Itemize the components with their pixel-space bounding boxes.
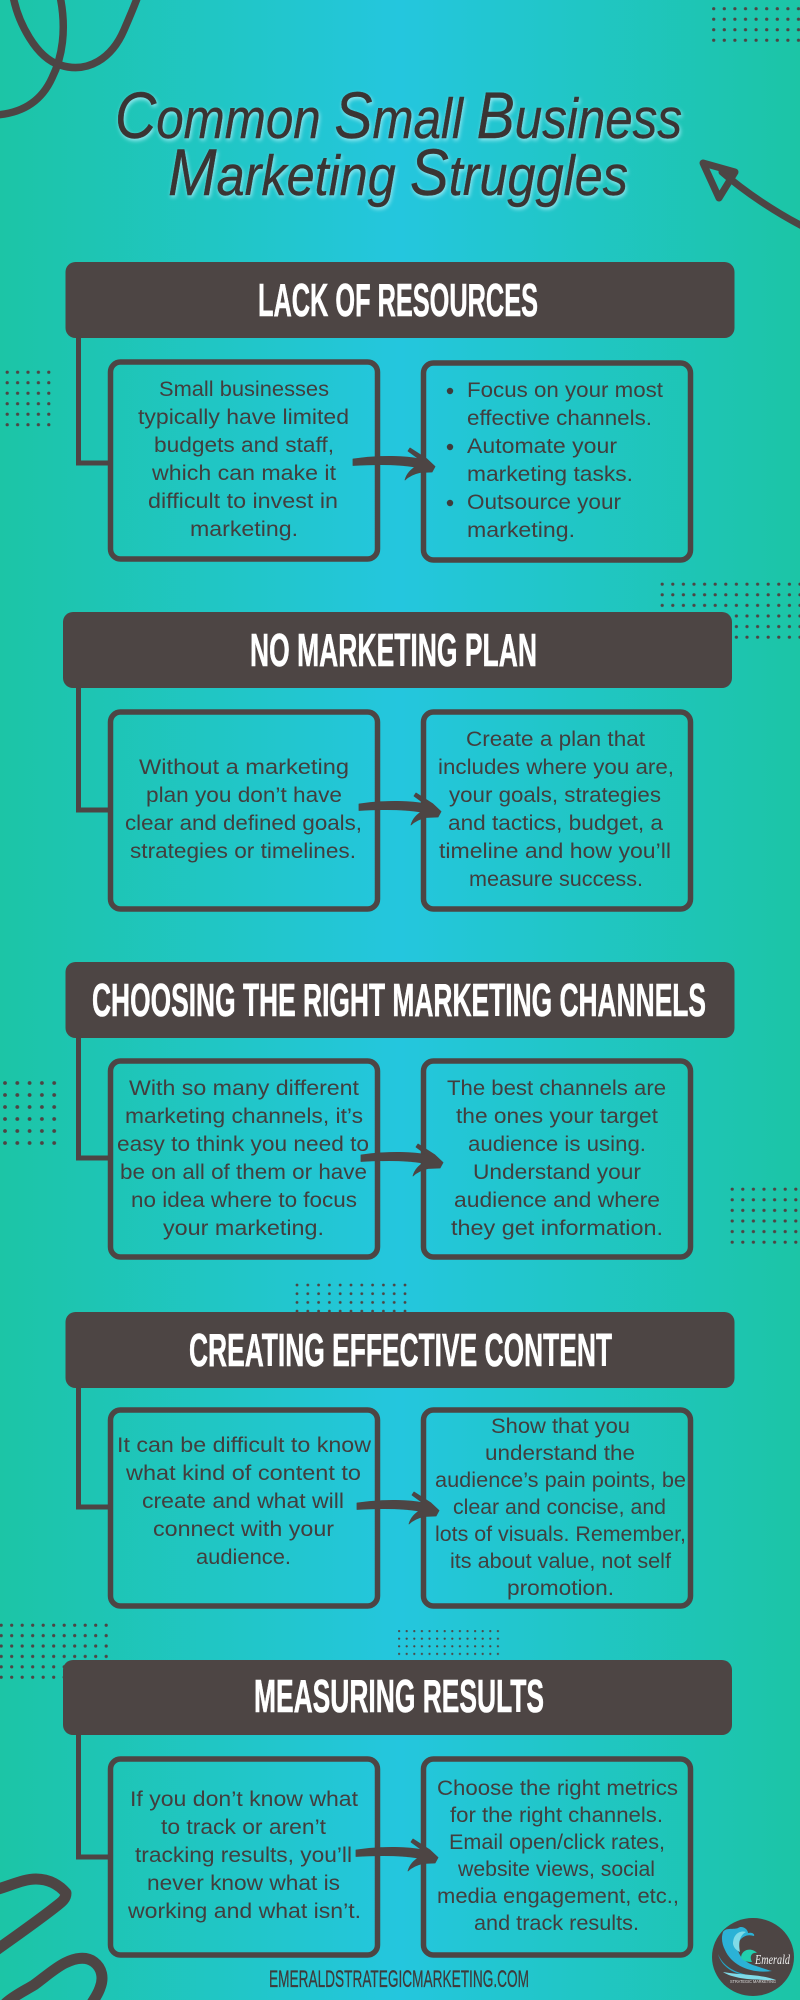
section 2 solution text: timeline and how you’ll — [439, 840, 671, 863]
section 1 problem text: budgets and staff, — [154, 434, 334, 457]
section 5 problem text: working and what isn’t. — [127, 1900, 361, 1923]
section 3 problem text: marketing channels, it’s — [125, 1105, 363, 1128]
section 1 problem box — [110, 362, 378, 559]
section 1 solution box — [424, 363, 690, 560]
logo badge: STRATEGIC MARKETING — [730, 1979, 776, 1984]
section 4 header bar — [66, 1312, 734, 1388]
section 4 solution text: Show that you — [491, 1415, 630, 1438]
section 4 problem text — [117, 1434, 372, 1569]
decorative scribble top left — [0, 0, 138, 115]
dot grid top right — [712, 7, 800, 47]
section 3 problem box — [110, 1061, 378, 1257]
section 1: lack of resources — [66, 262, 734, 560]
section 4 problem text: what kind of content to — [125, 1462, 361, 1485]
title: Common Small Business — [115, 78, 682, 152]
section 4 solution text: understand the — [485, 1442, 635, 1465]
dot grid left above section 5 — [0, 1623, 110, 1680]
section 5 problem text: tracking results, you’ll — [135, 1844, 352, 1867]
section 5 problem text: If you don’t know what — [130, 1788, 358, 1811]
section 4 solution text: lots of visuals. Remember, — [435, 1523, 686, 1546]
dot grid right between sections 1 and 2 — [660, 582, 800, 640]
section 2 connector — [78, 688, 110, 810]
section 1 connector — [78, 338, 110, 463]
section 1 problem text — [138, 378, 349, 541]
section 1 solution list: marketing. — [467, 519, 575, 542]
section 3 solution box — [424, 1061, 690, 1257]
section 1 solution list: Focus on your most — [467, 379, 663, 402]
section 5 solution text: media engagement, etc., — [437, 1885, 679, 1908]
section 3 solution text — [447, 1077, 666, 1240]
section 4 connector — [78, 1388, 110, 1507]
section 5 problem text: never know what is — [147, 1872, 340, 1895]
section 3 problem text: easy to think you need to — [117, 1133, 369, 1156]
section 2 solution text: your goals, strategies — [449, 784, 661, 807]
section 2 solution box — [424, 712, 690, 909]
section 5 connector — [78, 1735, 110, 1857]
section 3 solution text: audience and where — [454, 1189, 660, 1212]
section 3 header bar — [66, 962, 734, 1038]
section 1 solution list: Automate your — [467, 435, 617, 458]
section 5 header bar — [63, 1660, 732, 1735]
section 5 solution text: and track results. — [474, 1912, 639, 1935]
section 3 problem text: With so many different — [129, 1077, 359, 1100]
section 2 problem text: plan you don’t have — [146, 784, 342, 807]
section 4 problem text: audience. — [196, 1546, 291, 1569]
section 5 problem box — [110, 1759, 378, 1955]
section 1 problem text: difficult to invest in — [148, 490, 338, 513]
section 4 problem text: connect with your — [153, 1518, 334, 1541]
section 1 solution list: effective channels. — [467, 407, 652, 430]
section 5 problem text — [127, 1788, 361, 1923]
section 1 arrow — [353, 448, 435, 480]
title — [115, 78, 682, 209]
section 4 solution text: clear and concise, and — [453, 1496, 666, 1519]
section 1 header bar — [66, 262, 734, 338]
section 5 solution text: Choose the right metrics — [437, 1777, 678, 1800]
section 2 solution text: Create a plan that — [466, 728, 645, 751]
section 3 solution text: The best channels are — [447, 1077, 666, 1100]
section 5 solution text: Email open/click rates, — [449, 1831, 665, 1854]
section 3 solution text: they get information. — [451, 1217, 663, 1240]
section 3 arrow — [361, 1144, 443, 1176]
section 3 problem text: no idea where to focus — [131, 1189, 357, 1212]
dot grid left of section 3 — [3, 1081, 57, 1146]
section 2 header bar — [63, 612, 732, 688]
section 5 heading: MEASURING RESULTS — [254, 1670, 544, 1722]
section 1 solution list — [447, 379, 663, 542]
scribble bottom left — [0, 1879, 102, 2000]
section 3 problem text: your marketing. — [163, 1217, 324, 1240]
section 3 problem text — [117, 1077, 369, 1240]
section 1 solution list: marketing tasks. — [467, 463, 633, 486]
section 2 solution text: includes where you are, — [438, 756, 674, 779]
section 3 solution text: the ones your target — [456, 1105, 658, 1128]
dot grid left of section 1 — [5, 370, 51, 427]
section 4 solution box — [424, 1410, 690, 1606]
section 5 arrow — [356, 1839, 438, 1871]
section 4: creating effective content — [66, 1312, 734, 1606]
section 1 problem text: Small businesses — [159, 378, 329, 401]
section 2: no marketing plan — [63, 612, 732, 909]
section 4 problem text: It can be difficult to know — [117, 1434, 372, 1457]
section 5 solution text: website views, social — [457, 1858, 655, 1881]
section 2 solution text: measure success. — [469, 868, 643, 891]
section 5 solution box — [424, 1759, 690, 1955]
dot grid between sections 3 and 4 — [295, 1283, 410, 1313]
arrow top right pointing to title — [703, 163, 800, 227]
section 2 solution text: and tactics, budget, a — [448, 812, 663, 835]
section 1 problem text: marketing. — [190, 518, 298, 541]
section 1 solution list: Outsource your — [467, 491, 621, 514]
footer website: EMERALDSTRATEGICMARKETING.COM — [269, 1966, 529, 1993]
section 3 problem text: be on all of them or have — [120, 1161, 367, 1184]
section 4 problem box — [110, 1410, 378, 1606]
section 1 heading: LACK OF RESOURCES — [258, 274, 538, 326]
dot grid right of section 3 — [730, 1187, 800, 1245]
section 4 solution text: audience’s pain points, be — [435, 1469, 686, 1492]
section 4 problem text: create and what will — [142, 1490, 344, 1513]
section 3: choosing the right marketing channels — [66, 962, 734, 1257]
section 5 solution text: for the right channels. — [450, 1804, 663, 1827]
section 2 problem text — [125, 756, 362, 863]
section 5 problem text: to track or aren’t — [161, 1816, 326, 1839]
section 5 solution text — [437, 1777, 679, 1935]
section 3 solution text: audience is using. — [468, 1133, 646, 1156]
section 1 problem text: typically have limited — [138, 406, 349, 429]
section 2 solution text — [438, 728, 674, 891]
section 4 solution text: promotion. — [507, 1577, 614, 1600]
section 5: measuring results — [63, 1660, 732, 1955]
section 2 problem text: Without a marketing — [139, 756, 349, 779]
section 2 problem text: strategies or timelines. — [130, 840, 356, 863]
section 2 arrow — [359, 793, 441, 825]
section 2 heading: NO MARKETING PLAN — [250, 624, 537, 676]
title: Marketing Struggles — [168, 135, 628, 209]
logo badge — [712, 1918, 794, 1996]
section 2 problem box — [110, 712, 378, 909]
section 3 connector — [78, 1038, 110, 1158]
section 2 problem text: clear and defined goals, — [125, 812, 362, 835]
section 3 solution text: Understand your — [473, 1161, 641, 1184]
section 4 solution text — [435, 1415, 686, 1600]
dot grid centre above section 5 — [398, 1630, 501, 1656]
section 1 problem text: which can make it — [151, 462, 336, 485]
section 4 solution text: its about value, not self — [450, 1550, 671, 1573]
section 4 arrow — [357, 1492, 439, 1524]
